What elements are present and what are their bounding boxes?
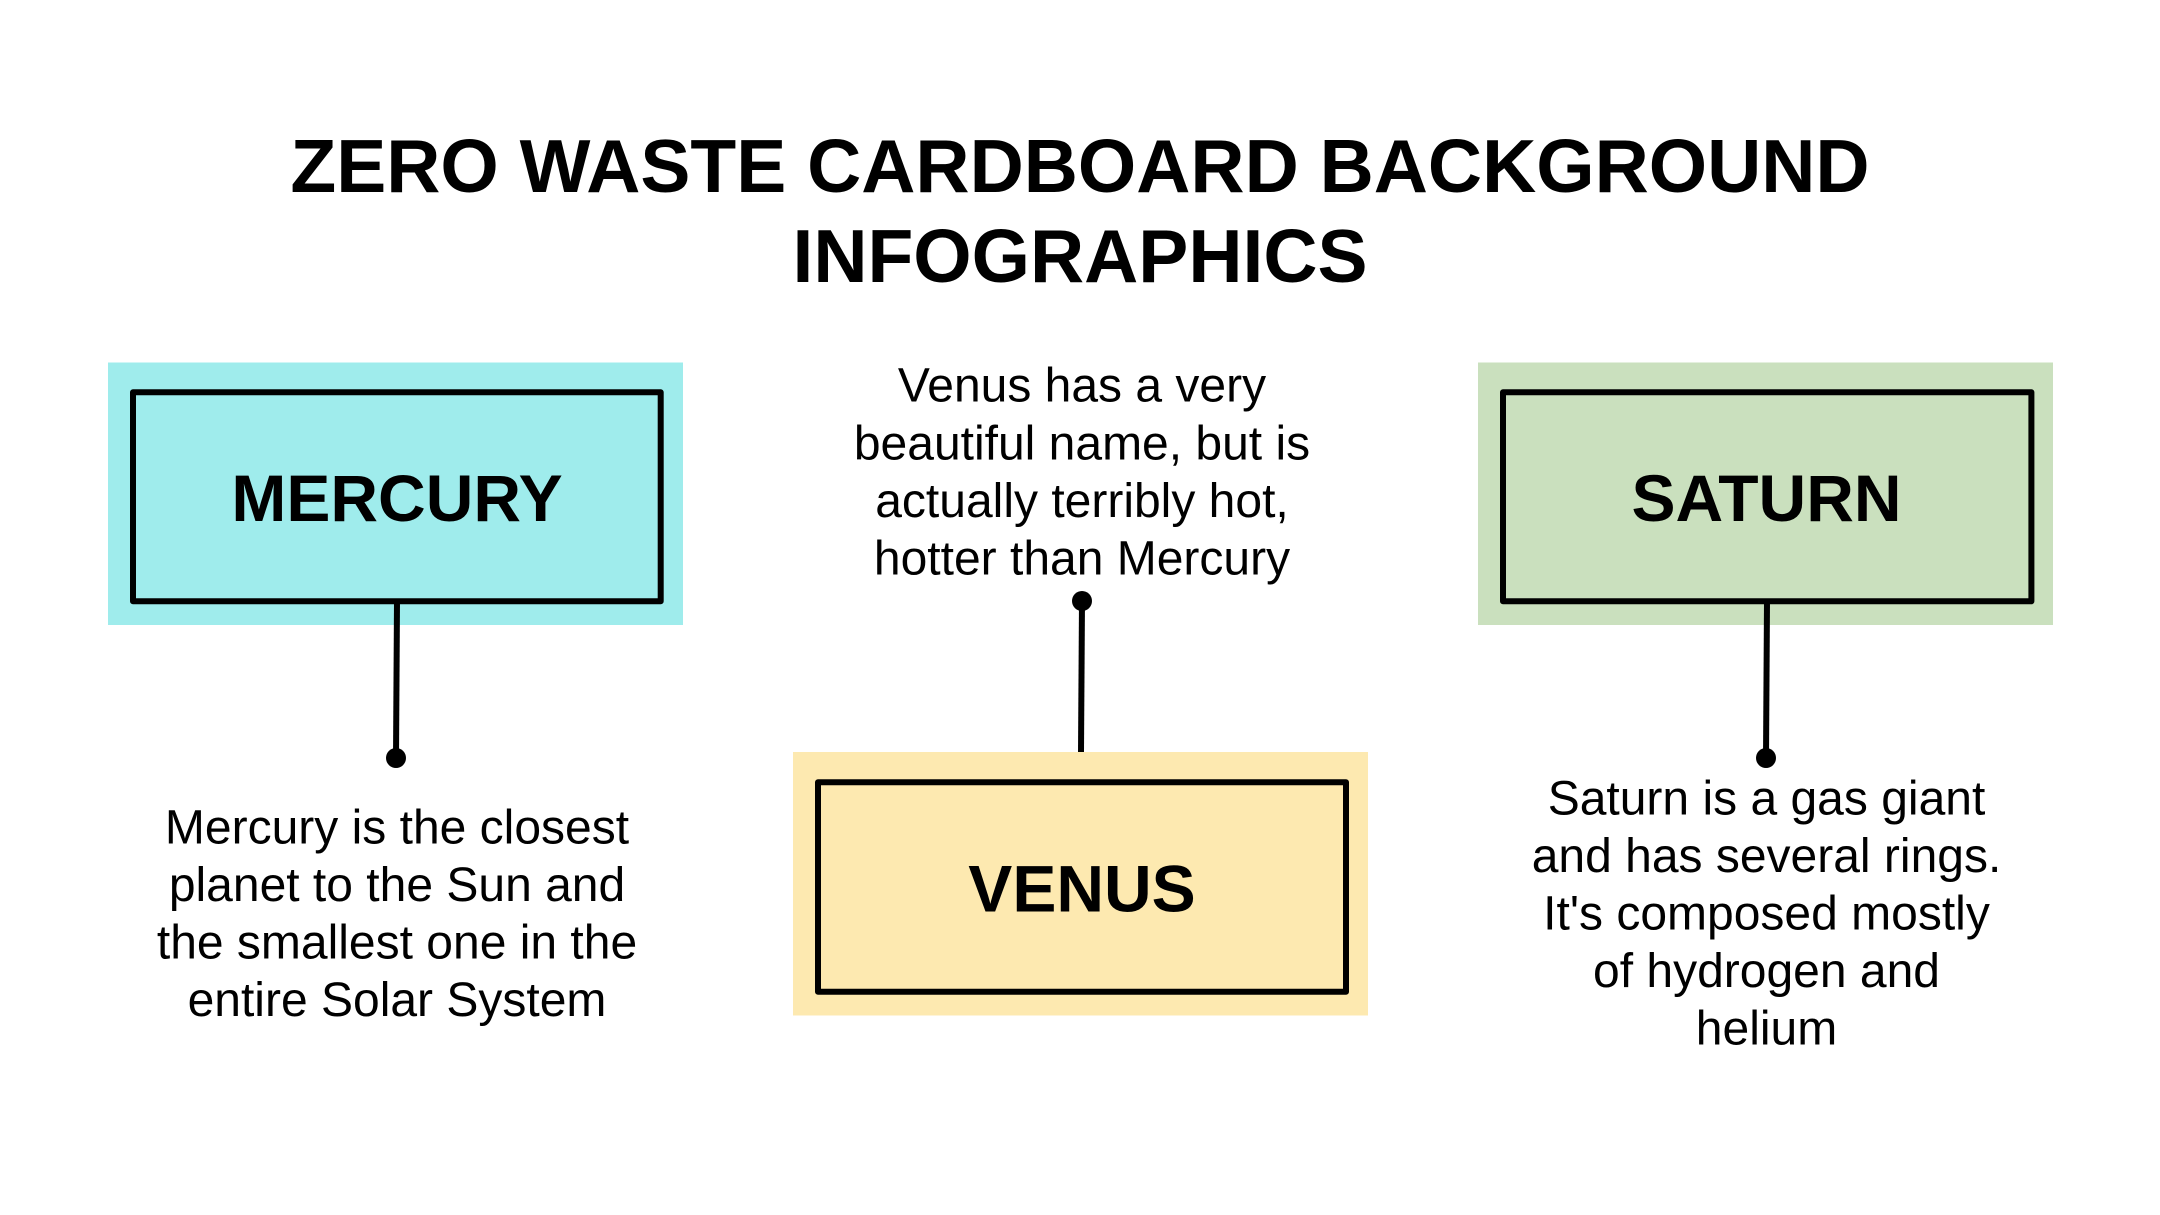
Saturn description <box>1532 772 2001 1056</box>
Mercury description <box>157 801 637 1027</box>
Mercury description: entire Solar System <box>188 974 606 1027</box>
Mercury description: Mercury is the closest <box>165 801 629 854</box>
Mercury connector <box>386 601 406 768</box>
Saturn label box: SATURN <box>1631 461 1902 535</box>
Saturn description: of hydrogen and <box>1593 945 1940 998</box>
Venus description: hotter than Mercury <box>874 532 1290 586</box>
Saturn description: Saturn is a gas giant <box>1548 772 1985 825</box>
Saturn label box <box>1478 362 2053 625</box>
title <box>290 124 1870 298</box>
panel: Saturn <box>1478 362 2053 1056</box>
panel: Venus <box>793 360 1368 1016</box>
Saturn description: and has several rings. <box>1532 830 2001 883</box>
Venus connector <box>1072 591 1092 752</box>
Venus description: actually terribly hot, <box>875 475 1289 528</box>
Venus label box <box>793 752 1368 1016</box>
Mercury label box: MERCURY <box>231 461 563 535</box>
Saturn connector <box>1756 601 1776 768</box>
title: ZERO WASTE CARDBOARD BACKGROUND <box>290 124 1870 208</box>
Saturn description: It's composed mostly <box>1543 888 1990 940</box>
Mercury description: the smallest one in the <box>157 917 637 970</box>
panel: Mercury <box>108 362 683 1027</box>
Mercury description: planet to the Sun and <box>169 859 625 912</box>
Venus description: Venus has a very <box>898 360 1266 413</box>
title: INFOGRAPHICS <box>792 214 1368 298</box>
Venus description: beautiful name, but is <box>854 417 1310 470</box>
Mercury label box <box>108 362 683 625</box>
Saturn description: helium <box>1696 1003 1837 1056</box>
Venus label box: VENUS <box>968 852 1196 926</box>
Venus description <box>854 360 1310 586</box>
